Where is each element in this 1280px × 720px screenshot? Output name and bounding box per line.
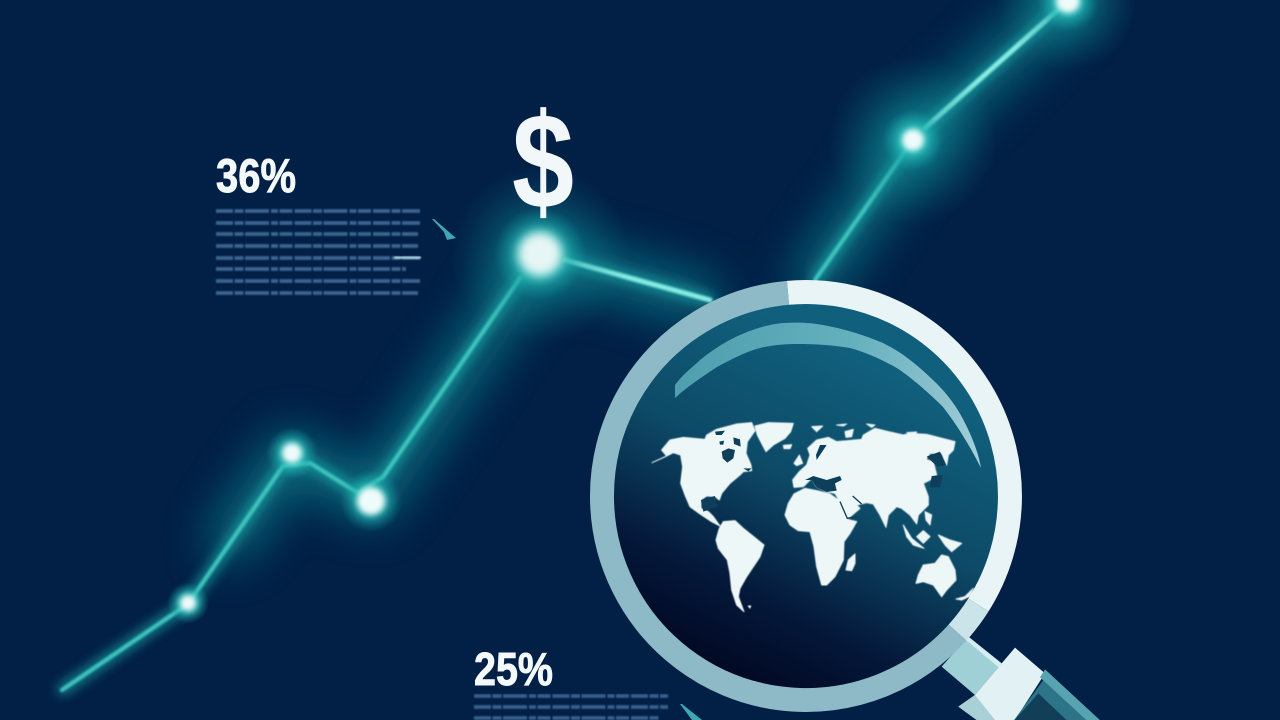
accent dash: [394, 256, 421, 259]
text block: illegible body copy under 36%: [216, 211, 420, 293]
handle neck: [942, 637, 1002, 695]
red sea and persian gulf: [840, 496, 862, 518]
Hudson Bay and Arctic channels: [715, 431, 752, 471]
icon: dollar sign: $: [512, 85, 574, 237]
magnifier handle: [942, 637, 1103, 720]
node 6: [998, 0, 1138, 71]
lens glass: [612, 302, 1000, 690]
lens ring: blue segment: [602, 293, 958, 700]
bright line segments: [565, 8, 1060, 300]
islands: [748, 424, 973, 608]
node 1: [167, 582, 209, 624]
node 5: [828, 55, 998, 225]
Sea of Okhotsk and Japan: [927, 452, 946, 487]
lens highlight crescent: [675, 323, 981, 468]
data points: [167, 0, 1138, 624]
map seas and lakes: [701, 431, 946, 512]
arrow: small teal pointer: [432, 219, 456, 240]
stat: 25%: 25%: [474, 643, 553, 695]
stat: 36%: 36%: [216, 149, 296, 202]
North America: [652, 423, 755, 526]
Mediterranean and Black Sea: [805, 476, 842, 492]
handle grip: [1012, 669, 1103, 720]
node 2: [266, 427, 318, 479]
world map: [652, 423, 973, 612]
wide line glow: [230, 0, 1068, 540]
text block: illegible copy at top: [740, 3, 940, 6]
Baltic: [816, 445, 827, 460]
Eurasia: [793, 428, 955, 527]
handle collar: [958, 648, 1045, 720]
line chart: glowing growth line: [62, 0, 1068, 690]
Australia: [916, 555, 956, 597]
Africa: [785, 488, 857, 585]
line core: [62, 140, 913, 690]
lens ring: shaded segment: [958, 605, 978, 633]
magnifying glass: [602, 292, 1103, 720]
lens ring: white segment: [788, 292, 1010, 605]
Gulf of Mexico: [701, 496, 717, 512]
text block: illegible body copy under 25%: [474, 696, 668, 718]
Greenland: [755, 423, 793, 452]
South America: [716, 521, 764, 612]
arrow: small teal pointer bottom: [680, 704, 702, 720]
near line glow: [62, 0, 1068, 690]
node 4: peak: [450, 164, 630, 344]
node 3: [340, 470, 402, 532]
